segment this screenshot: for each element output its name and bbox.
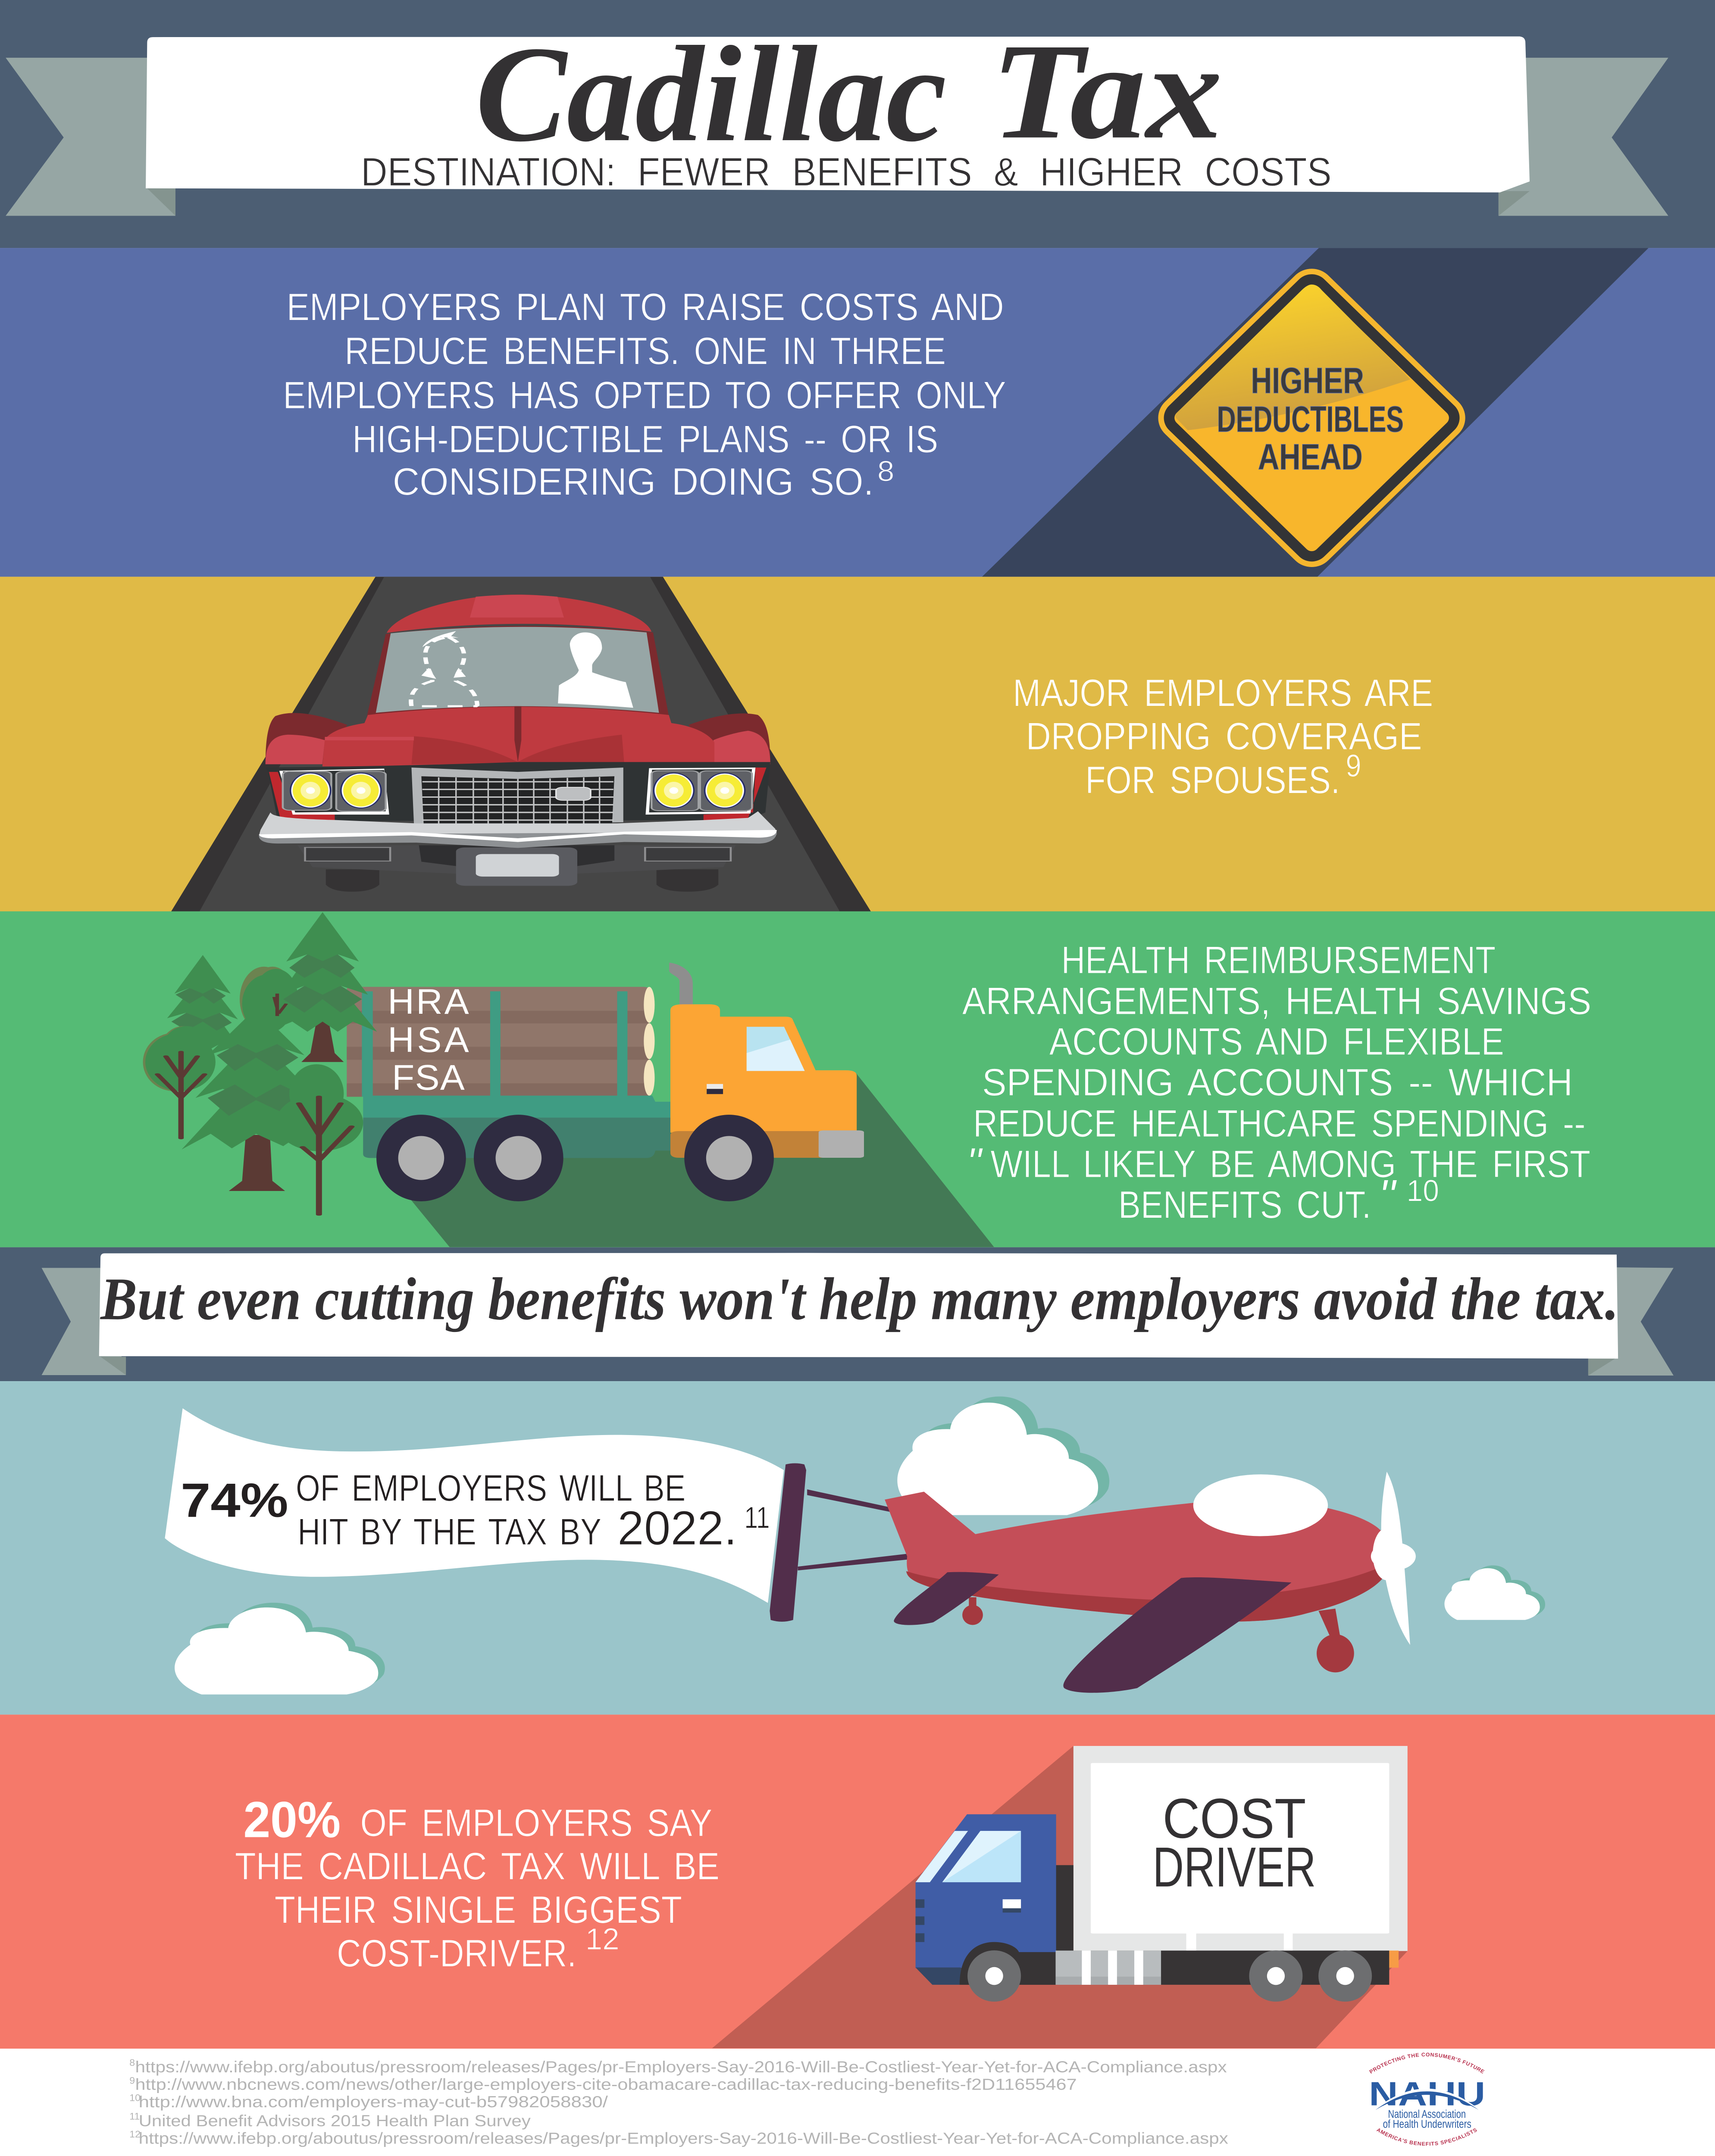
logging truck illustration [143,912,994,1247]
icon: road sign: AHEAD [1258,437,1363,477]
banner pole [770,1463,806,1622]
ribbon tail left [41,1268,126,1375]
branches right [299,1097,352,1215]
text block: health reimbursement: HEALTH REIMBURSEMENT [1061,939,1496,982]
panel: header [0,0,1715,248]
text block: 20 percent: THE CADILLAC TAX WILL BE [235,1845,720,1888]
propeller [1371,1472,1416,1645]
text block: 20 percent: 12 [585,1923,620,1956]
cloud top [897,1397,1125,1518]
logo: NAHU: AMERICA'S BENEFITS SPECIALISTS [1376,2127,1478,2147]
cloud bottom left [175,1603,385,1695]
cloud right [1444,1565,1545,1620]
title: Cadillac [476,18,947,170]
cost driver label: COST [1163,1787,1306,1850]
footnotes: 8 [129,2057,135,2068]
icon: road sign: DEDUCTIBLES [1217,399,1404,440]
subtitle: DESTINATION: FEWER BENEFITS & HIGHER COSTS [361,150,1332,194]
footnotes: 9 [129,2075,135,2086]
tow lines [798,1489,910,1570]
slogan banner [99,1253,1618,1359]
logo: NAHU: National Association [1388,2109,1466,2120]
tires [326,869,718,892]
cost driver label [1153,1787,1316,1899]
stakes and bed [362,991,670,1158]
ribbon tail left [6,58,175,216]
panel: account benefits [0,911,1715,1247]
headlights right [645,768,755,815]
labels on logs: FSA [392,1057,465,1097]
labels on logs: HRA [388,981,469,1022]
cost driver label: DRIVER [1153,1836,1316,1899]
cab [670,1004,864,1158]
diagonal shadow band [982,248,1649,577]
text block: health reimbursement: " [967,1139,983,1185]
fuselage [885,1492,1390,1621]
banner text [181,1467,770,1555]
grille face [266,762,770,821]
footnotes: http://www.nbcnews.com/news/other/large-employers-cite-obamacare-cadillac-tax-reducing-benefits-f2D11655467 [135,2075,1077,2093]
labels on logs: HSA [388,1020,469,1059]
banner text: 11 [744,1501,770,1535]
text block: health reimbursement: 10 [1406,1174,1439,1208]
truck [347,962,994,1247]
banner text: HIT BY THE TAX BY [297,1511,601,1553]
hood [322,706,714,766]
near wheel [1317,1609,1354,1673]
text block: 20 percent [235,1792,720,1975]
airplane illustration [165,1397,1545,1695]
panel: slogan band [0,1247,1715,1381]
far wheel [962,1597,983,1625]
text block: health reimbursement: REDUCE HEALTHCARE SPENDING -- [973,1102,1586,1145]
round tree right [276,1064,363,1151]
road [171,577,871,911]
text block: health reimbursement: WILL LIKELY BE AMONG THE FIRST [991,1143,1590,1186]
pine center [182,1008,332,1191]
wheels [967,1950,1372,2002]
text block: 20 percent: 20% [244,1792,341,1848]
cab [916,1814,1056,1985]
truck shadow [712,1746,1408,2048]
title banner [146,36,1530,192]
far wing [894,1572,999,1625]
text block: health reimbursement: " [1378,1170,1397,1222]
under-bumper details [297,845,735,886]
pine back left [165,955,244,1055]
text block: 20 percent: THEIR SINGLE BIGGEST [275,1889,682,1931]
roof and windshield [367,595,669,716]
labels on logs [388,981,469,1097]
text block: health reimbursement [962,939,1591,1226]
icon: road sign: HIGHER [1251,360,1364,401]
cargo box [1073,1746,1408,1951]
footnotes: 12 [129,2129,141,2140]
text block: employers plan: 8 [877,455,894,487]
exhaust stack [669,962,693,1005]
side steps [1056,1951,1161,1985]
footnotes: United Benefit Advisors 2015 Health Plan Survey [139,2112,531,2130]
text block: employers plan: EMPLOYERS PLAN TO RAISE COSTS AND [287,286,1004,329]
pine back right [268,912,377,1062]
banner text: 2022. [617,1501,737,1555]
title: Tax [991,15,1223,167]
logo: NAHU: of Health Underwriters [1383,2118,1471,2131]
title [476,15,1223,170]
text block: health reimbursement: BENEFITS CUT. [1118,1184,1371,1226]
cockpit [1193,1474,1328,1536]
footnotes [129,2057,1228,2147]
panel: cost driver [0,1714,1715,2049]
headlights left [279,769,389,815]
driver silhouette [558,633,633,708]
icon: red car [259,595,777,892]
text block: health reimbursement: ARRANGEMENTS, HEALTH SAVINGS [962,980,1591,1023]
near wing [1063,1577,1291,1693]
footnotes: https://www.ifebp.org/aboutus/pressroom/releases/Pages/pr-Employers-Say-2016-Will-Be-Costliest-Year-Yet-for-ACA-Compliance.aspx [139,2129,1228,2147]
chrome grille [411,768,623,828]
text block: employers plan: REDUCE BENEFITS. ONE IN THREE [344,330,946,373]
panel: higher deductibles [0,248,1715,577]
text block: major employers: FOR SPOUSES. [1085,759,1340,802]
text block: 20 percent: OF EMPLOYERS SAY [360,1802,712,1845]
text block: major employers [1013,672,1433,802]
text block: major employers: DROPPING COVERAGE [1026,715,1422,758]
ribbon tail right [1499,58,1668,216]
round tree left [143,1026,216,1091]
panel: footer [0,2049,1715,2156]
footnotes: 11 [129,2111,140,2122]
logs [347,987,655,1097]
round tree middle [240,967,298,1033]
text block: health reimbursement: ACCOUNTS AND FLEXIBLE [1049,1020,1504,1063]
logo: NAHU: NAHU [1369,2075,1485,2112]
text block: health reimbursement: SPENDING ACCOUNTS -- WHICH [982,1061,1573,1104]
text block: 20 percent: COST-DRIVER. [337,1932,576,1975]
footnotes: https://www.ifebp.org/aboutus/pressroom/releases/Pages/pr-Employers-Say-2016-Will-Be-Costliest-Year-Yet-for-ACA-Compliance.aspx [135,2058,1227,2076]
text block: major employers: 9 [1346,748,1361,783]
logo: NAHU: PROTECTING THE CONSUMER'S FUTURE [1368,2052,1486,2075]
chassis [961,1865,1399,1985]
panel: airplane [0,1381,1715,1714]
banner text: OF EMPLOYERS WILL BE [296,1467,685,1509]
missing spouse dashed outline [411,631,477,706]
branches left [157,1052,205,1138]
banner text: 74% [181,1473,288,1527]
footnotes: 10 [129,2093,141,2103]
text block: major employers: MAJOR EMPLOYERS ARE [1013,672,1433,714]
bumper [259,812,777,848]
fenders [266,713,770,764]
trees [143,912,377,1215]
delivery truck illustration [712,1746,1408,2048]
text block: employers plan: HIGH-DEDUCTIBLE PLANS -- OR IS [352,418,938,461]
panel: spouse coverage [0,577,1715,911]
text block: employers plan: CONSIDERING DOING SO. [393,461,874,503]
text block: employers plan: EMPLOYERS HAS OPTED TO OFFER ONLY [283,374,1006,417]
icon: road sign [1175,285,1442,544]
footnotes: http://www.bna.com/employers-may-cut-b57982058830/ [139,2093,608,2111]
ribbon tail right [1588,1267,1674,1376]
towed banner [165,1408,784,1603]
text block: employers plan [283,286,1006,503]
truck shadow [377,1073,994,1247]
logo: NAHU [1368,2052,1486,2147]
wheels [376,1115,774,1201]
